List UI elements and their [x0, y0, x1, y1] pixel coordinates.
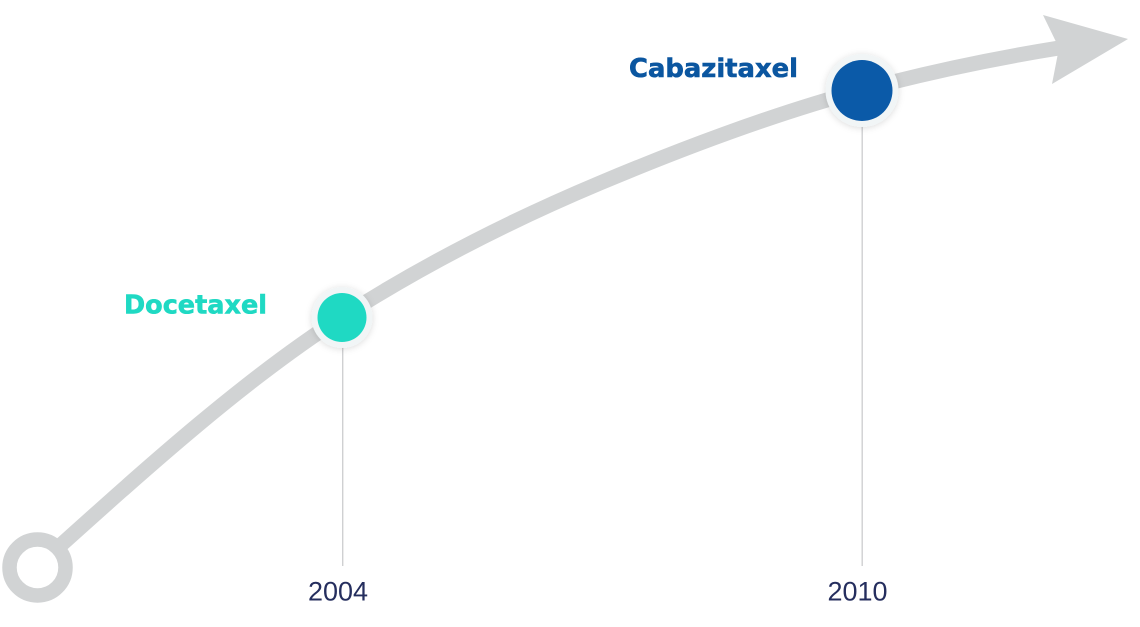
marker: Cabazitaxel [826, 54, 898, 127]
label: Cabazitaxel: Cabazitaxel [629, 54, 798, 84]
connector line 2010 [862, 125, 863, 566]
year: 2010: 2010 [828, 576, 888, 606]
label: Docetaxel: Docetaxel [124, 290, 267, 320]
marker: Docetaxel [312, 287, 372, 348]
year: 2004: 2004 [308, 576, 368, 606]
start ring marker [10, 540, 66, 596]
connector line 2004 [342, 345, 343, 566]
arrow head [1043, 15, 1128, 84]
